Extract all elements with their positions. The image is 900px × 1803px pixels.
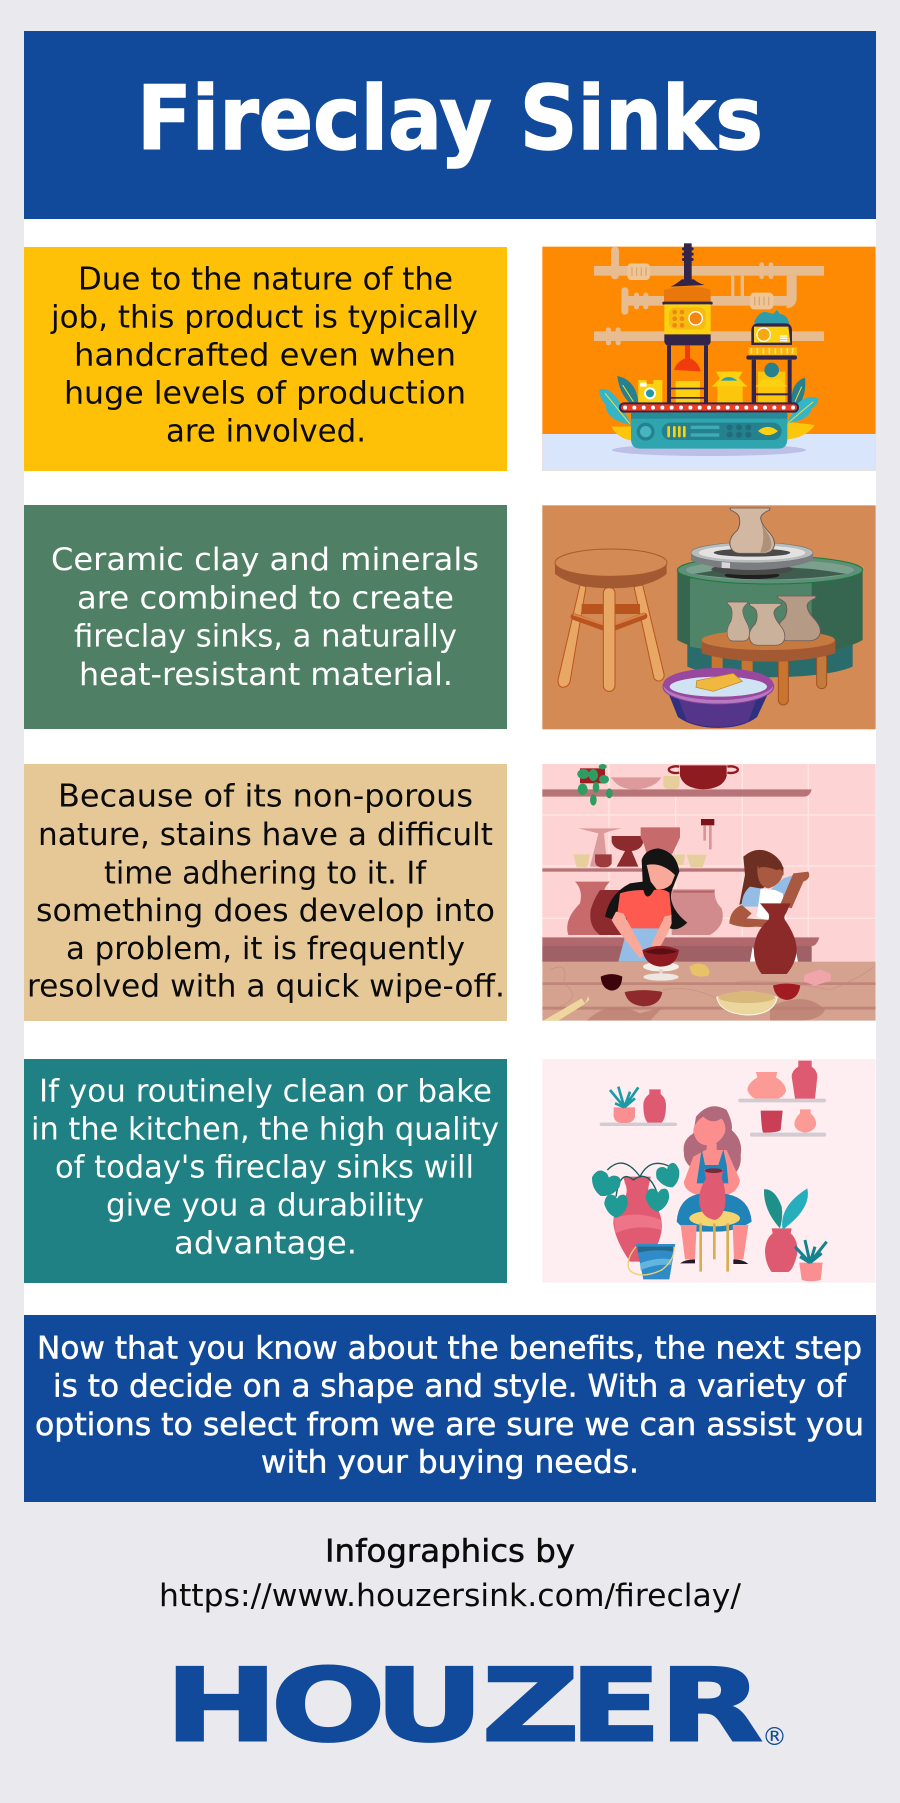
potter's wheel — [691, 508, 813, 579]
top shelf with pots — [542, 765, 812, 797]
panel: durability text: advantage. — [174, 1225, 357, 1261]
work table — [542, 962, 876, 1021]
call to action banner: is to decide on a shape and style. With a variety of — [53, 1369, 847, 1405]
call to action banner: options to select from we are sure we can assist you — [35, 1407, 864, 1443]
panel: durability text: give you a durability — [106, 1188, 424, 1224]
call to action banner — [24, 1315, 876, 1502]
panel: stains text: Because of its non-porous — [58, 779, 473, 815]
woman with vase — [729, 850, 809, 974]
panel: ceramic clay text: heat-resistant material. — [79, 657, 453, 693]
panel: stains text: nature, stains have a difficult — [38, 817, 493, 853]
panel: durability text: If you routinely clean or bake — [39, 1074, 492, 1110]
conveyor belt — [619, 402, 799, 413]
panel: handcrafted text: job, this product is typically — [50, 299, 478, 335]
green tub — [677, 556, 863, 677]
panel: ceramic clay text: are combined to create — [77, 580, 454, 616]
panel: stains text: something does develop into — [36, 893, 495, 929]
panel: handcrafted text: are involved. — [166, 414, 366, 450]
panel: handcrafted text: handcrafted even when — [74, 338, 456, 374]
call to action banner: Now that you know about the benefits, the next step — [37, 1330, 862, 1366]
bowl on stand — [642, 946, 679, 981]
wooden stool — [555, 549, 667, 691]
panel: stains text: resolved with a quick wipe-off. — [27, 969, 505, 1005]
packages — [638, 372, 747, 403]
leaves — [599, 376, 818, 441]
seated potter — [677, 1106, 752, 1272]
illustration: potter with plants — [542, 1059, 876, 1283]
footer credit — [159, 1534, 742, 1614]
title banner: Fireclay Sinks — [137, 67, 763, 170]
table items — [543, 964, 831, 1021]
blue bucket — [628, 1244, 675, 1279]
panel: ceramic clay text: Ceramic clay and minerals — [51, 542, 479, 578]
right plants — [764, 1188, 827, 1281]
panel: ceramic clay text: fireclay sinks, a naturally — [74, 619, 457, 655]
logo: houzer: HOUZER — [165, 1647, 763, 1765]
panel: handcrafted text — [24, 247, 507, 471]
panel: durability text: in the kitchen, the high quality — [31, 1111, 499, 1147]
illustration: potter's wheel and stool — [542, 505, 876, 729]
basin with sponge — [663, 668, 774, 727]
hanging plant — [577, 764, 613, 806]
panel: stains text: time adhering to it. If — [104, 855, 427, 891]
shelves with pots — [600, 1061, 826, 1137]
panel: stains text: a problem, it is frequently — [66, 931, 465, 967]
footer credit: https://www.houzersink.com/fireclay/ — [159, 1578, 742, 1614]
title banner — [24, 31, 876, 219]
middle shelf with pottery — [542, 819, 746, 872]
illustration: factory production line — [542, 243, 876, 471]
big vase with heart leaves — [587, 1162, 684, 1262]
machine base — [631, 413, 787, 449]
panel: durability text: of today's fireclay sinks will — [55, 1150, 474, 1186]
panel: handcrafted text: Due to the nature of the — [78, 261, 453, 297]
large pots — [542, 882, 819, 962]
panel: stains text — [24, 764, 507, 1021]
machine one — [662, 243, 713, 403]
panel: ceramic clay text — [24, 505, 507, 729]
call to action banner: with your buying needs. — [261, 1445, 639, 1481]
woman with bowl — [605, 848, 687, 962]
panel: durability text — [24, 1059, 507, 1283]
small table with vases — [702, 596, 835, 705]
machine two — [746, 310, 797, 404]
illustration: pottery workshop — [542, 764, 876, 1021]
panel: handcrafted text: huge levels of production — [64, 375, 466, 411]
footer credit: Infographics by — [325, 1534, 575, 1570]
logo: houzer: ® — [762, 1722, 787, 1751]
